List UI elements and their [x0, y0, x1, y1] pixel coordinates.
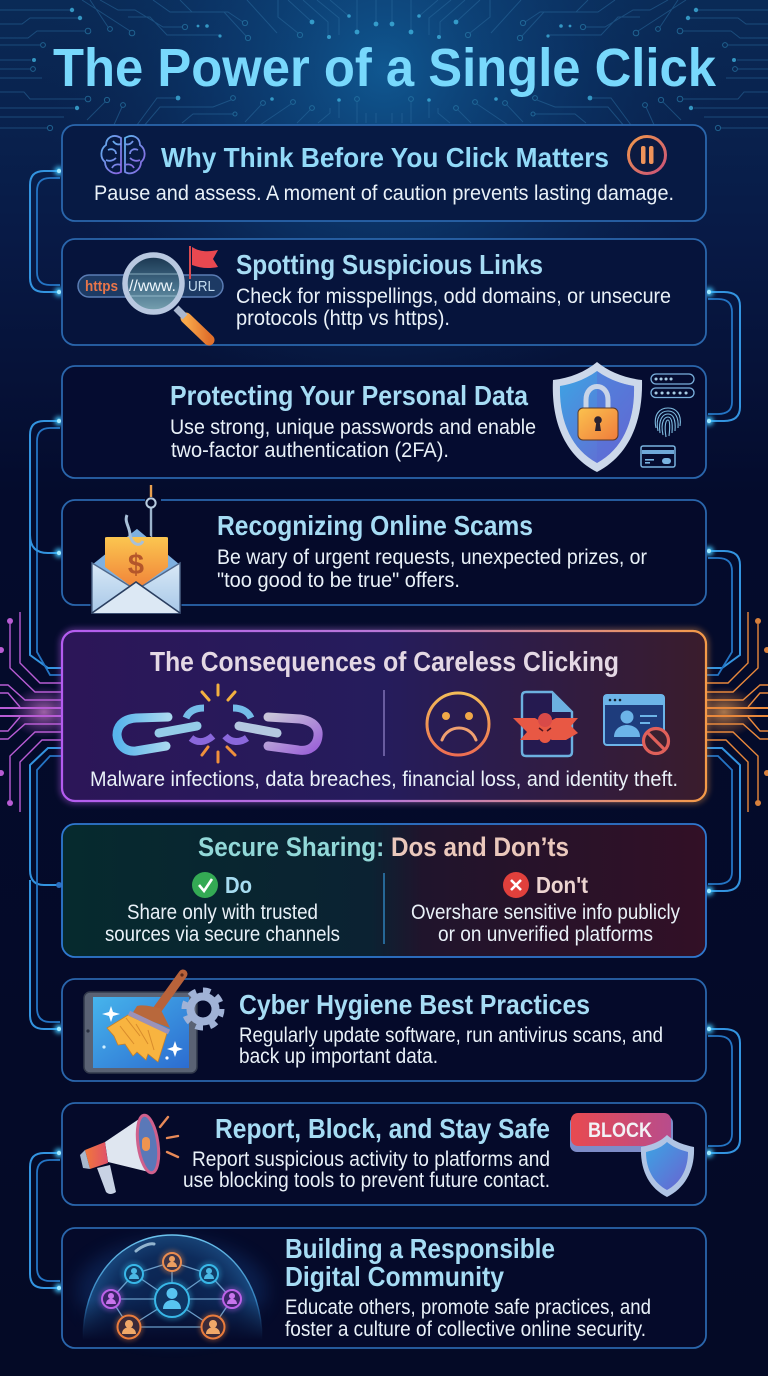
body text: Be wary of urgent requests, unexpected prizes, or	[217, 546, 647, 569]
circuit fan: right of consequences panel	[690, 612, 768, 812]
don't text: or on unverified platforms	[438, 923, 653, 946]
heading: Secure Sharing: Dos and Don’ts	[198, 832, 569, 862]
heading	[285, 1233, 555, 1292]
heading: Digital Community	[285, 1261, 504, 1292]
divider	[383, 873, 385, 944]
body text: Check for misspellings, odd domains, or unsecure	[236, 285, 671, 308]
panel: recognizing online scams	[62, 485, 706, 613]
body text: protocols (http vs https).	[236, 307, 450, 330]
body text: Malware infections, data breaches, financial loss, and identity theft.	[90, 768, 678, 791]
don't text: Overshare sensitive info publicly	[411, 901, 680, 924]
connector: left, step 8 to 9	[30, 1148, 64, 1292]
body text: Use strong, unique passwords and enable	[170, 416, 536, 439]
panel: cyber hygiene best practices	[62, 973, 706, 1081]
panel: spotting suspicious links	[62, 239, 706, 345]
body text: two-factor authentication (2FA).	[171, 439, 449, 462]
icon: phishing hook and envelope: $	[128, 549, 144, 581]
icon: tablet with broom and gear	[84, 973, 222, 1073]
icon: brain	[101, 136, 145, 173]
connector: right, step 4 to 5	[704, 546, 740, 675]
icon: network dome	[76, 1235, 268, 1347]
icon: sad face	[427, 693, 489, 755]
icon: block button: BLOCK	[588, 1119, 652, 1142]
connector: left, step 1 to 2	[30, 166, 64, 296]
body text	[239, 1024, 663, 1068]
connector: right, step 5 to 6	[704, 748, 740, 896]
body text	[285, 1296, 651, 1341]
icon: block button	[570, 1113, 673, 1152]
do text	[105, 901, 340, 946]
connector: right, step 7 to 8	[704, 1024, 740, 1158]
icon: pause	[628, 136, 666, 174]
heading: Cyber Hygiene Best Practices	[239, 989, 590, 1020]
connector: left, step 3 to 5	[30, 416, 64, 675]
body text: "too good to be true" offers.	[217, 569, 460, 592]
icon: infected file	[513, 692, 578, 756]
heading: Building a Responsible	[285, 1233, 555, 1264]
title: The Power of a Single Click	[53, 38, 717, 98]
icon: shield with padlock	[553, 362, 642, 472]
do column	[105, 872, 340, 946]
circuit pattern: top right	[390, 0, 768, 131]
circuit pattern: top left	[0, 0, 378, 131]
icon: magnifier over URL bar: URL	[188, 278, 215, 295]
body text: Educate others, promote safe practices, and	[285, 1296, 651, 1319]
connector: right, step 2 to 3	[704, 288, 740, 426]
icon: phishing hook and envelope	[92, 485, 180, 613]
panel: why think before you click matters	[62, 125, 706, 221]
heading: The Consequences of Careless Clicking	[150, 646, 619, 677]
panel: consequences of careless clicking	[62, 631, 706, 801]
heading: Protecting Your Personal Data	[170, 380, 528, 411]
icon: magnifier over URL bar: //www.	[129, 278, 176, 295]
icon: megaphone	[80, 1114, 178, 1194]
icon: broken chain	[117, 685, 318, 762]
label: don't: Don't	[536, 872, 588, 898]
heading: Why Think Before You Click Matters	[161, 142, 609, 173]
heading: Recognizing Online Scams	[217, 510, 533, 541]
icon: shield	[641, 1135, 694, 1197]
body text: Regularly update software, run antivirus scans, and	[239, 1024, 663, 1047]
icon: check	[192, 872, 218, 898]
body text: Report suspicious activity to platforms and	[192, 1148, 550, 1171]
heading: Report, Block, and Stay Safe	[215, 1113, 550, 1144]
body text	[217, 546, 647, 592]
icon: magnifier over URL bar	[78, 246, 223, 340]
label: do: Do	[225, 872, 252, 898]
connector: left, step 5 to 7	[30, 748, 64, 1034]
don't column	[411, 872, 680, 946]
panel: building a responsible digital community	[62, 1228, 706, 1348]
don't text	[411, 901, 680, 946]
icon: identity theft window	[604, 695, 668, 754]
icon: cross	[503, 872, 529, 898]
circuit fan: left of consequences panel	[0, 612, 78, 812]
panel: report, block, stay safe	[62, 1103, 706, 1205]
heading: Spotting Suspicious Links	[236, 249, 543, 280]
panel: secure sharing dos and don'ts	[62, 824, 706, 957]
panel: protecting your personal data	[62, 362, 706, 478]
do text: Share only with trusted	[127, 901, 318, 924]
icon: credit card	[641, 446, 675, 467]
body text	[183, 1148, 550, 1192]
icon: magnifier over URL bar: https	[85, 278, 118, 295]
icon: password fields	[651, 374, 694, 398]
icon: fingerprint	[655, 408, 680, 437]
body text: foster a culture of collective online security.	[285, 1318, 646, 1341]
body text	[236, 285, 671, 330]
body text: use blocking tools to prevent future contact.	[183, 1169, 550, 1192]
body text	[170, 416, 536, 462]
body text: Pause and assess. A moment of caution prevents lasting damage.	[94, 182, 674, 205]
body text: back up important data.	[239, 1045, 438, 1068]
divider	[383, 690, 385, 756]
background glow	[0, 0, 768, 420]
do text: sources via secure channels	[105, 923, 340, 946]
